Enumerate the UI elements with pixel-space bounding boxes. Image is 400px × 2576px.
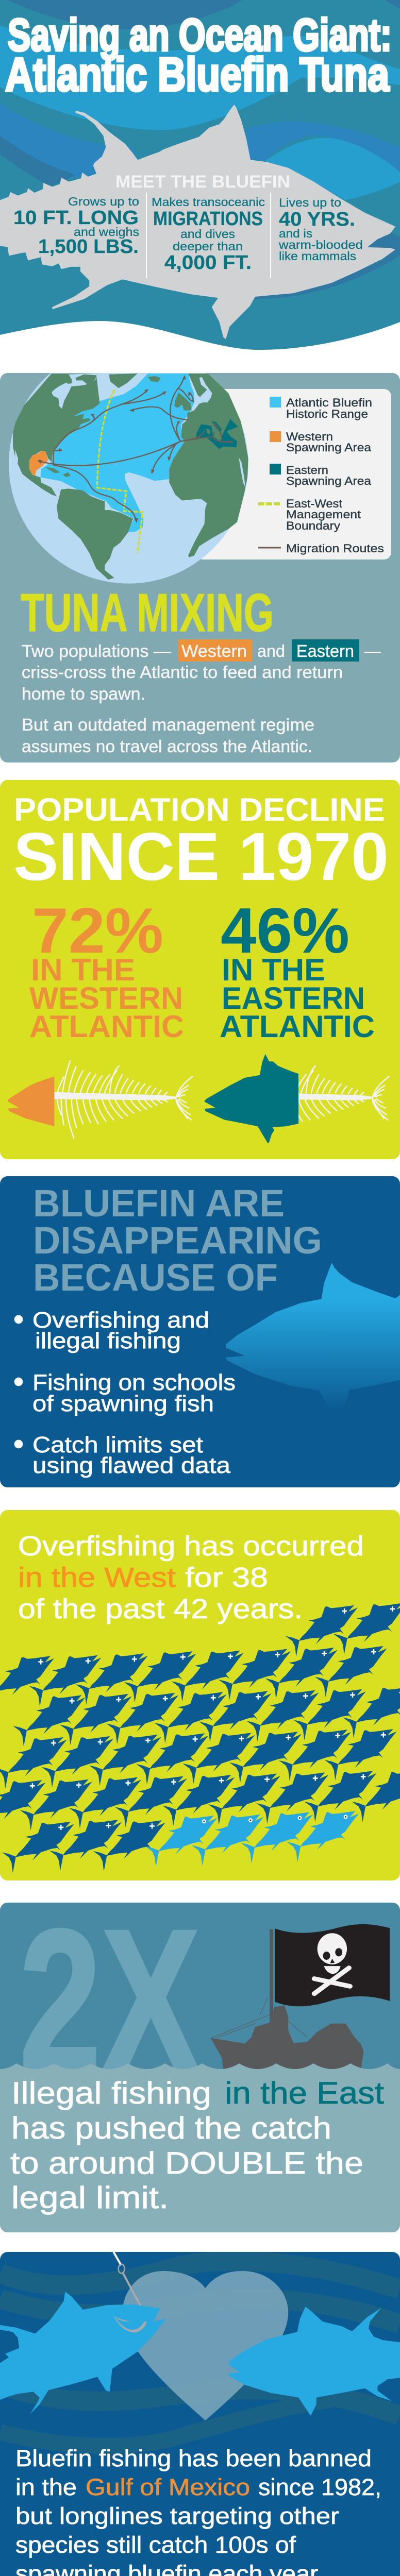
fact: migrations [152, 195, 265, 274]
fact: migrations: MIGRATIONS [153, 208, 263, 230]
wavy ocean background [0, 0, 400, 355]
panel background [0, 1176, 400, 1487]
heading: population decline since 1970: SINCE 1970 [13, 819, 389, 894]
mixing text: assumes no travel across the Atlantic. [22, 737, 312, 756]
legend labels: Historic Range [286, 408, 368, 420]
heading: BECAUSE OF [33, 1256, 278, 1299]
stat: 72% western: ATLANTIC [29, 1009, 184, 1044]
statement text: of the past 42 years. [18, 1594, 303, 1624]
school of fish: 38 dark, 4 light [0, 1603, 400, 1873]
fact: migrations: deeper than [173, 240, 243, 253]
mixing text: criss-cross the Atlantic to feed and return [22, 663, 343, 682]
legend labels: Western [286, 430, 333, 443]
bullet list [14, 1308, 236, 1478]
mixing text: — [364, 641, 381, 660]
legend labels: Atlantic Bluefin [286, 396, 372, 409]
panel background [0, 2252, 400, 2576]
fact: migrations: 4,000 FT. [164, 252, 252, 274]
bluefin silhouette [0, 105, 395, 339]
stat: 46% eastern: 46% [221, 895, 349, 967]
stat: 72% western: 72% [32, 895, 163, 967]
wave bands [0, 2261, 400, 2446]
panel: overfishing in the west [0, 1510, 400, 1880]
statement text: has pushed the catch [11, 2111, 331, 2145]
stat: 72% western: IN THE [31, 953, 135, 987]
statement text [15, 2445, 381, 2576]
north america [13, 374, 99, 496]
stat: 46% eastern: ATLANTIC [220, 1009, 375, 1044]
mixing text: Eastern [296, 641, 354, 660]
bullet list: Overfishing and [32, 1308, 209, 1333]
fact: lifespan: Lives up to [279, 196, 341, 209]
western tag [178, 639, 252, 662]
panel: illegal fishing in the east [0, 1887, 400, 2232]
mixing text: But an outdated management regime [22, 715, 314, 734]
statement text: Gulf of Mexico [86, 2474, 250, 2500]
mixing text: and [257, 641, 285, 660]
fish silhouette [226, 1263, 400, 1412]
fact: lifespan: warm-blooded [278, 238, 363, 251]
heart [123, 2271, 288, 2420]
legend labels: Spawning Area [286, 474, 372, 487]
statement text: Illegal fishing [11, 2076, 211, 2110]
panel background [0, 1903, 400, 2232]
panel: why bluefin are disappearing [0, 1176, 400, 1487]
hooked fish [0, 2292, 166, 2414]
header: ocean background with title and bluefin [0, 0, 400, 355]
panel: tuna mixing [0, 344, 400, 762]
bullet list: Fishing on schools [32, 1370, 236, 1395]
heading: DISAPPEARING [33, 1219, 322, 1262]
icon: fishing boat silhouette [210, 1997, 363, 2071]
title [5, 9, 392, 101]
water with scalloped surface [0, 2063, 400, 2081]
bullet list: using flawed data [32, 1453, 231, 1478]
statement text: Bluefin fishing has been banned [15, 2445, 372, 2471]
heading: meet the bluefin: MEET THE BLUEFIN [115, 172, 290, 192]
stat: 46% eastern [220, 895, 375, 1044]
legend box [196, 389, 391, 560]
fact: size and weight [13, 195, 139, 258]
fact: size and weight: Grows up to [68, 195, 139, 208]
icon: western fish skeleton [8, 1061, 193, 1138]
fact: lifespan: 40 YRS. [279, 209, 355, 230]
statement text: in the West [18, 1562, 176, 1593]
panel background [0, 780, 400, 1159]
legend labels: Eastern [286, 464, 328, 477]
fact: migrations: Makes transoceanic [152, 195, 265, 209]
fact: lifespan: like mammals [279, 249, 356, 263]
statement text: but longlines targeting other [15, 2503, 339, 2529]
legend labels: Migration Routes [286, 542, 384, 555]
statement text: to around DOUBLE the [10, 2146, 363, 2180]
statement text: in the East [225, 2076, 384, 2110]
mixing text: Western [181, 641, 247, 660]
statement text: since 1982, [258, 2474, 381, 2500]
heading [33, 1182, 322, 1299]
legend [258, 396, 384, 555]
panel background [0, 373, 400, 762]
stat: 46% eastern: EASTERN [222, 981, 365, 1015]
heading: tuna mixing: TUNA MIXING [21, 583, 274, 643]
statement text: species still catch 100s of [15, 2532, 296, 2558]
fact: size and weight: 10 FT. LONG [13, 207, 139, 229]
mixing text: Two populations — [22, 641, 171, 660]
big 2X: 2X [19, 1887, 201, 2114]
statement text: for 38 [185, 1562, 268, 1593]
legend labels: Spawning Area [286, 441, 372, 454]
stat: 72% western [29, 895, 184, 1044]
heading: population decline since 1970: POPULATION DECLINE [14, 792, 385, 828]
panel: gulf of mexico [0, 2252, 400, 2576]
stat: 72% western: WESTERN [29, 981, 183, 1015]
second fish [228, 2307, 400, 2416]
legend swatches [258, 397, 281, 548]
fact: lifespan [278, 196, 363, 263]
fact: size and weight: and weighs [74, 225, 139, 239]
panel: population decline [0, 780, 400, 1159]
mixing text [22, 641, 381, 756]
dividers [146, 193, 271, 278]
stat: 46% eastern: IN THE [222, 953, 325, 987]
legend labels: Boundary [286, 519, 340, 532]
eastern tag [292, 639, 359, 662]
mixing text: home to spawn. [22, 684, 145, 703]
legend labels [286, 396, 384, 555]
legend labels: Management [286, 508, 361, 521]
icon: eastern fish half skeleton [204, 1054, 389, 1143]
statement text [18, 1531, 364, 1624]
statement text: legal limit. [11, 2180, 169, 2215]
panel background [0, 1510, 400, 1880]
statement text: in the [15, 2474, 77, 2500]
bullet list: of spawning fish [32, 1391, 214, 1416]
hook and line [113, 2252, 140, 2306]
heading: BLUEFIN ARE [33, 1182, 285, 1225]
statement text [10, 2076, 384, 2215]
legend labels: East-West [286, 497, 342, 510]
fact: migrations: and dives [180, 227, 235, 241]
globe map [9, 373, 248, 584]
icon: pirate flag [270, 1924, 390, 2024]
bullet list: illegal fishing [35, 1328, 181, 1353]
fact: size and weight: 1,500 LBS. [38, 236, 139, 258]
statement text: Overfishing has occurred [18, 1531, 364, 1562]
bullet list: Catch limits set [32, 1432, 203, 1458]
sky background [0, 1903, 400, 2073]
fact: lifespan: and is [279, 227, 312, 240]
